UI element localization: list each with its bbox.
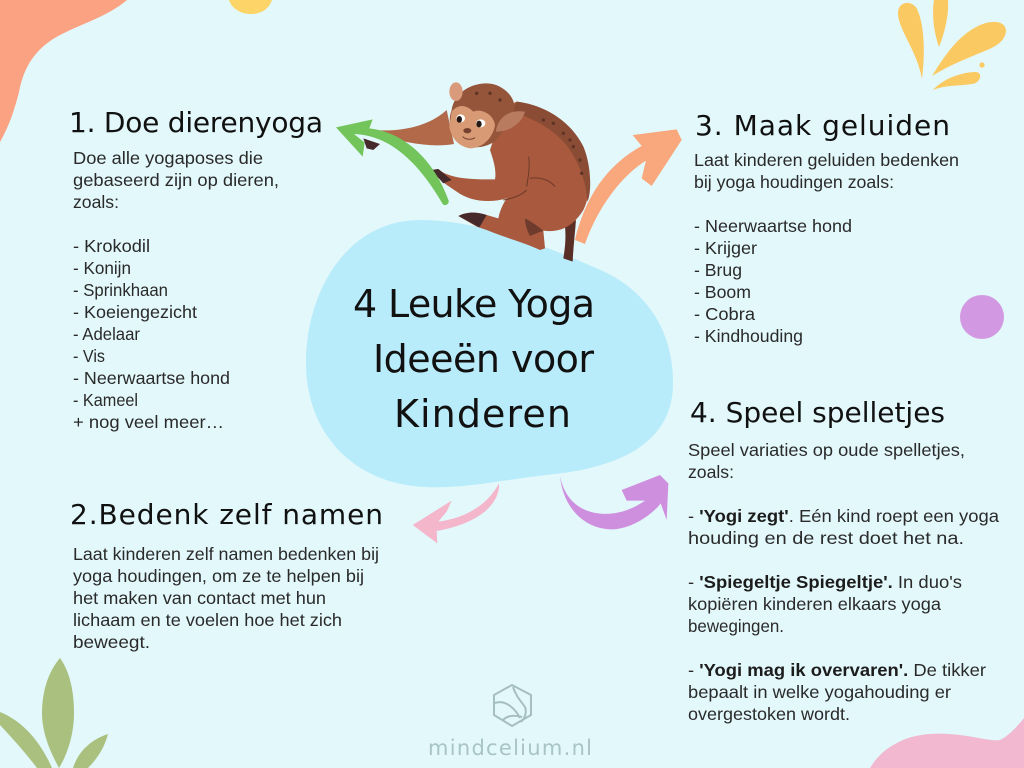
monkey upper arm <box>375 110 454 145</box>
text block 1: - Kameel <box>73 390 138 410</box>
text block 4: kopiëren kinderen elkaars yoga <box>688 594 941 614</box>
monkey face <box>449 106 495 148</box>
text block 2: yoga houdingen, om ze te helpen bij <box>73 566 364 586</box>
decoration: purple circle right <box>960 295 1004 339</box>
text block 4: - 'Spiegeltje Spiegeltje'. In duo's <box>688 572 962 592</box>
monkey ear right <box>496 111 525 132</box>
text block 2: het maken van contact met hun <box>73 588 326 608</box>
monkey fur specks <box>475 92 583 175</box>
title <box>353 282 595 436</box>
section 4: play games <box>688 396 999 724</box>
heading 2: 2.Bedenk zelf namen <box>70 498 383 531</box>
text block 3: bij yoga houdingen zoals: <box>694 172 894 192</box>
text block 1: - Neerwaartse hond <box>73 368 230 388</box>
arrow: pink to section 2 <box>413 483 499 543</box>
monkey nose and mouth <box>463 128 475 139</box>
decoration: green leaves bottom-left <box>0 658 108 768</box>
central blue blob <box>306 220 673 487</box>
text block 4: houding en de rest doet het na. <box>688 528 964 548</box>
monkey head <box>450 83 514 147</box>
text block 1: - Koeiengezicht <box>73 302 197 322</box>
text block 2 <box>73 544 379 652</box>
monkey dark hands and foot <box>363 138 487 227</box>
text block 4: - 'Yogi zegt' . Eén kind roept een yoga <box>688 506 999 526</box>
text block 4: bepaalt in welke yogahouding er <box>688 682 951 702</box>
text block 1: + nog veel meer… <box>73 412 224 432</box>
logo: hexagon mark <box>494 685 531 726</box>
monkey body and limbs <box>432 102 590 250</box>
illustration: monkey <box>363 82 590 262</box>
text block 4: - 'Yogi mag ik overvaren'. De tikker <box>688 660 986 680</box>
decoration: pink blob bottom-right <box>870 718 1024 768</box>
text block 4 <box>688 440 999 724</box>
title: Ideeën voor <box>373 337 594 381</box>
text block 1: - Konijn <box>73 258 131 278</box>
text block 4: overgestoken wordt. <box>688 704 850 724</box>
text block 3: - Brug <box>694 260 742 280</box>
tail <box>563 220 576 262</box>
text block 3: - Boom <box>694 282 751 302</box>
decoration: yellow circle top <box>229 0 272 14</box>
text block 4: Speel variaties op oude spelletjes, <box>688 440 965 460</box>
monkey ear left <box>449 82 463 101</box>
section 1: animal yoga <box>69 106 323 432</box>
monkey arm lines <box>503 157 555 200</box>
arrow: purple to section 4 <box>560 475 668 529</box>
arrow: orange to section 3 <box>575 129 682 244</box>
text block 2: lichaam en te voelen hoe het zich <box>73 610 342 630</box>
text block 1 <box>73 148 279 432</box>
text block 3: - Kindhouding <box>694 326 803 346</box>
title: 4 Leuke Yoga <box>353 282 595 326</box>
title: Kinderen <box>394 392 571 436</box>
logo text: mindcelium.nl <box>428 736 592 760</box>
decoration: yellow splash top-right <box>898 0 1006 90</box>
text block 1: - Vis <box>73 346 105 366</box>
section 3: make sounds <box>694 109 959 346</box>
text block 2: beweegt. <box>73 632 150 652</box>
section 2: make up names <box>70 498 383 652</box>
text block 4: zoals: <box>688 462 734 482</box>
heading 3: 3. Maak geluiden <box>695 109 950 142</box>
text block 1: - Krokodil <box>73 236 150 256</box>
heading 1: 1. Doe dierenyoga <box>69 106 323 139</box>
text block 3: - Neerwaartse hond <box>694 216 852 236</box>
text block 3 <box>694 150 959 346</box>
decoration: coral blob top-left <box>0 0 127 142</box>
text block 1: - Sprinkhaan <box>73 280 168 300</box>
text block 3: Laat kinderen geluiden bedenken <box>694 150 959 170</box>
monkey shaded leg <box>525 218 543 236</box>
text block 4: bewegingen. <box>688 616 784 636</box>
text block 3: - Cobra <box>694 304 755 324</box>
text block 2: Laat kinderen zelf namen bedenken bij <box>73 544 379 564</box>
text block 1: gebaseerd zijn op dieren, <box>73 170 279 190</box>
arrow: green to section 1 <box>336 119 449 205</box>
monkey back fur <box>512 102 590 202</box>
heading 4: 4. Speel spelletjes <box>690 396 945 429</box>
text block 1: Doe alle yogaposes die <box>73 148 263 168</box>
text block 1: zoals: <box>73 192 119 212</box>
text block 3: - Krijger <box>694 238 757 258</box>
monkey eyes <box>456 114 485 127</box>
text block 1: - Adelaar <box>73 324 140 344</box>
